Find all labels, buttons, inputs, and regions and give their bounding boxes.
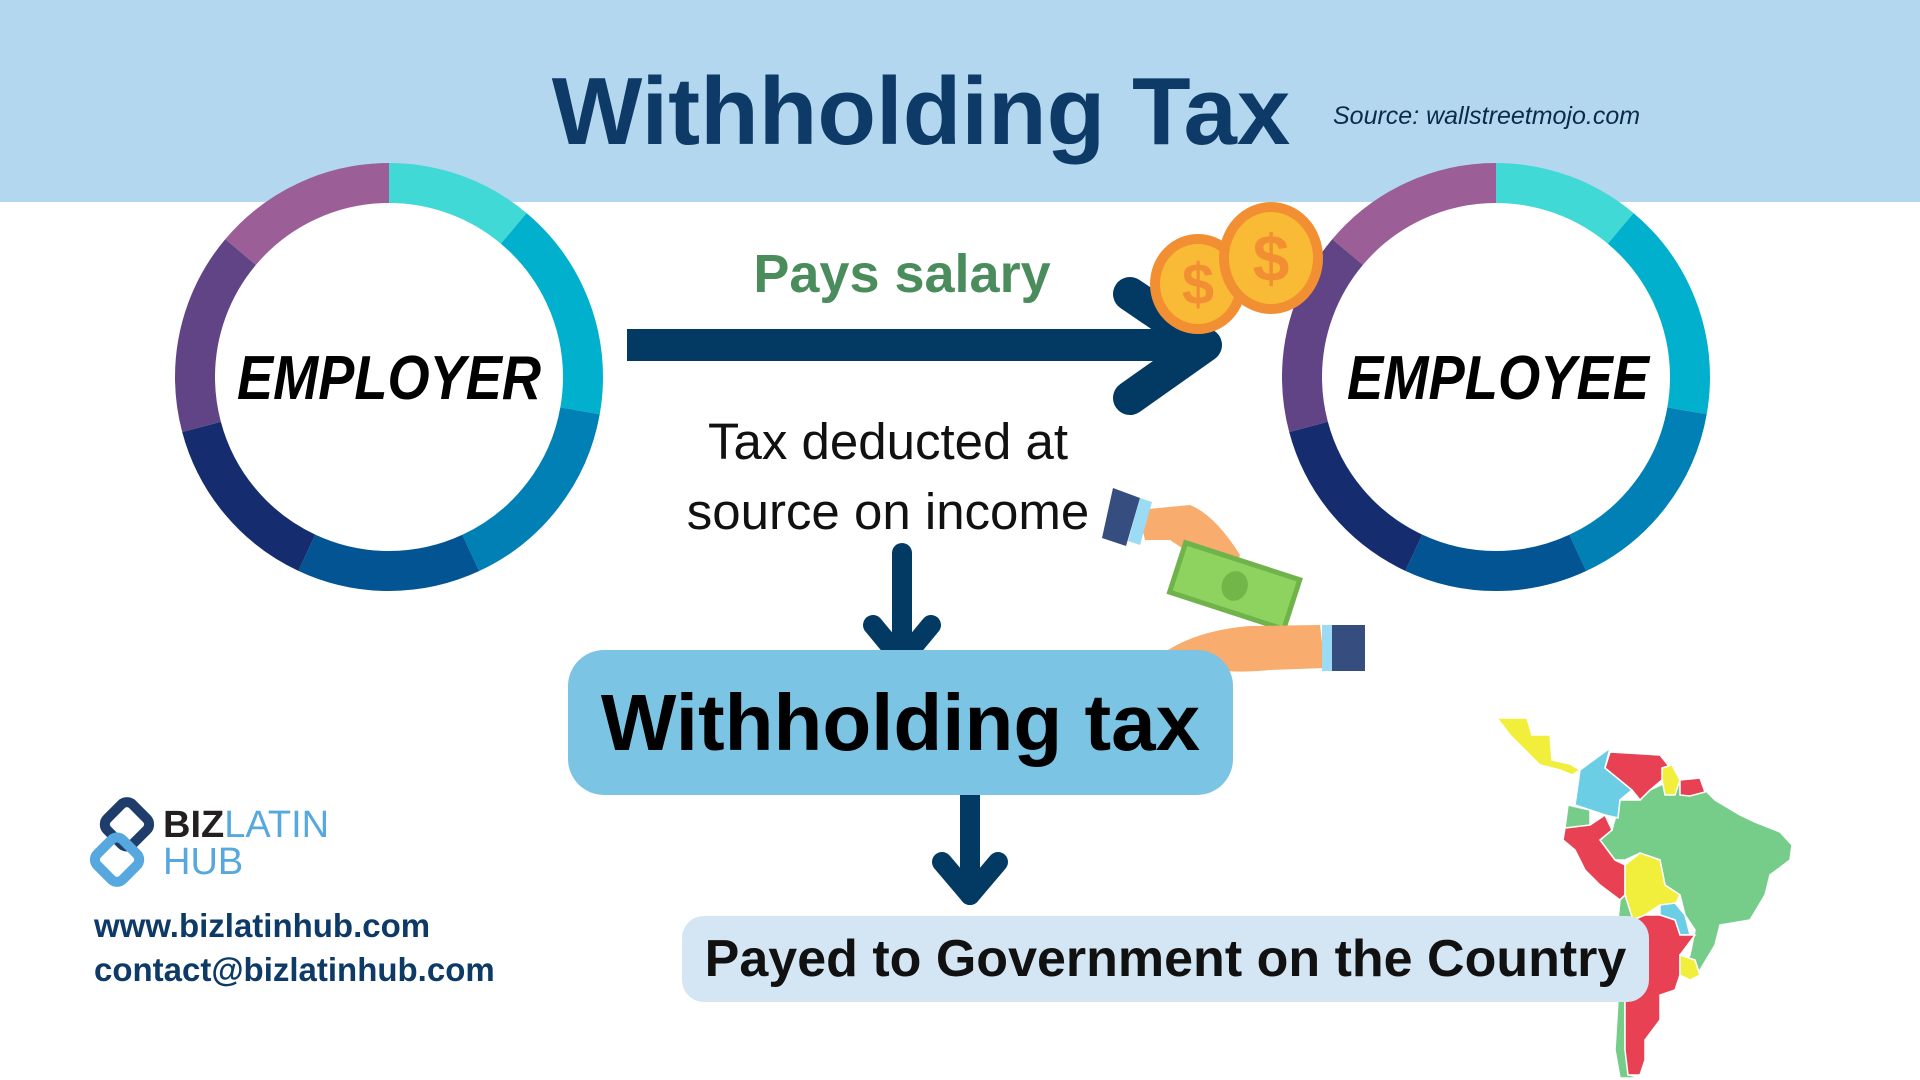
label: employee: EMPLOYEE: [1347, 344, 1650, 413]
box: payed to government: [682, 916, 1649, 1002]
ring: employer: [195, 183, 583, 571]
title: Withholding Tax: [552, 58, 1290, 165]
ring: employee: [1302, 183, 1690, 571]
label: employer: EMPLOYER: [237, 344, 541, 413]
icon: hands with money: [1102, 488, 1365, 672]
arrow: pays salary: [627, 294, 1205, 398]
logo: biz latin hub: [79, 799, 329, 885]
contact info: www.bizlatinhub.com: [94, 907, 430, 944]
icon: coins: $: [1182, 252, 1214, 317]
logo: biz latin hub: HUB: [163, 841, 243, 883]
contact info: [94, 907, 495, 988]
box: withholding tax: [568, 650, 1233, 795]
contact info: contact@bizlatinhub.com: [94, 951, 495, 988]
box: withholding tax: Withholding tax: [601, 678, 1200, 767]
icon: coins: $: [1253, 221, 1289, 295]
icon: coins: [1155, 207, 1318, 329]
header band: [0, 0, 1920, 202]
box: payed to government: Payed to Government on the Country: [705, 930, 1626, 988]
arrow: down to government: [942, 795, 998, 895]
label: pays salary: Pays salary: [753, 244, 1051, 304]
logo: biz latin hub: BIZLATIN: [163, 804, 329, 846]
map: latin america: [1497, 718, 1792, 1078]
source note: Source: wallstreetmojo.com: [1333, 102, 1640, 130]
arrow: down to withholding tax: [873, 553, 931, 660]
text: tax deducted: source on income: [687, 483, 1089, 540]
text: tax deducted: [687, 413, 1089, 540]
text: tax deducted: Tax deducted at: [708, 413, 1068, 470]
